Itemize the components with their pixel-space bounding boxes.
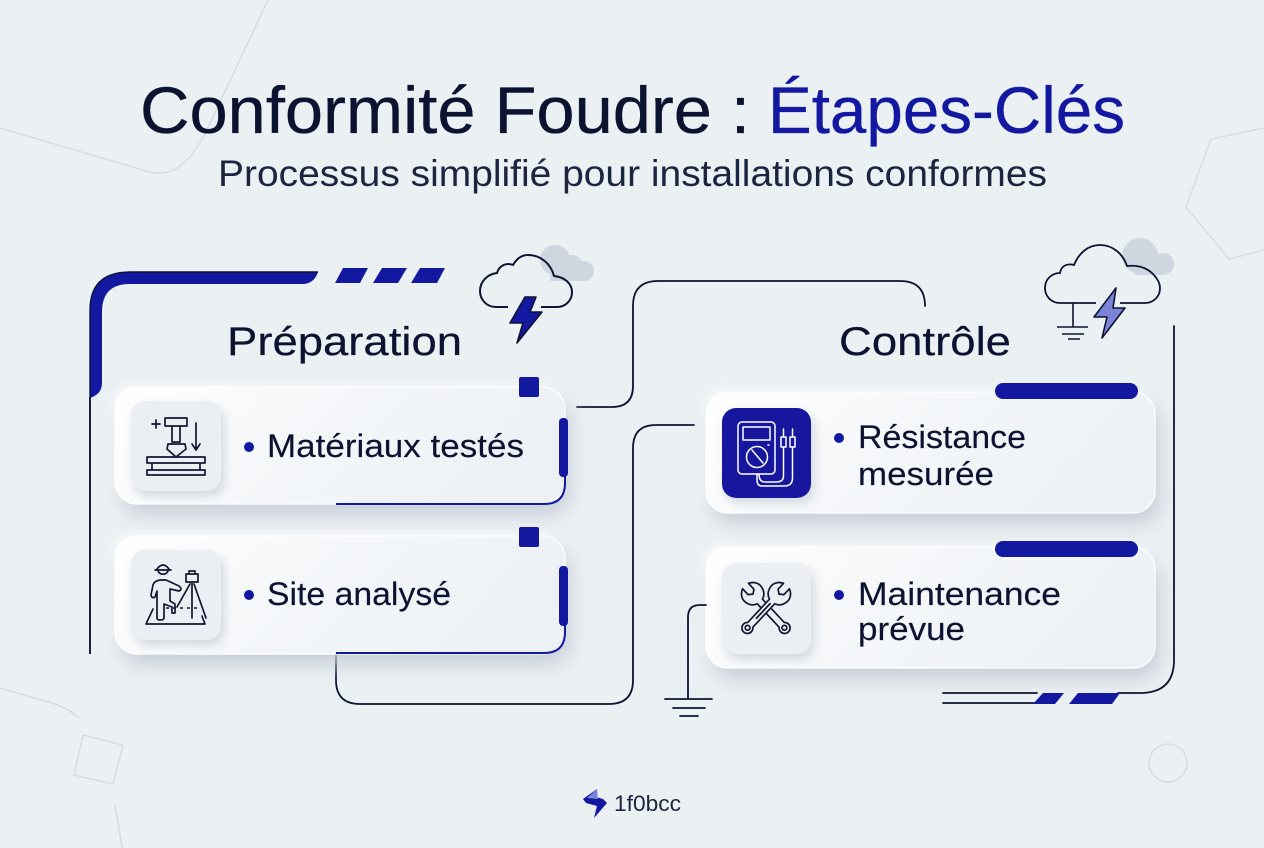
heading: preparation: Préparation <box>227 320 462 364</box>
connector: site card to resistance card <box>336 425 694 704</box>
heading: controle: Contrôle <box>839 320 1011 364</box>
accent: square <box>519 527 539 547</box>
accent: top bar <box>995 541 1138 557</box>
accent: square <box>519 377 539 397</box>
icon: cloud with ground and lightning <box>1045 238 1174 339</box>
panel: card site analyse <box>115 527 568 654</box>
bullet and label <box>834 419 1026 492</box>
panel: card materiaux testes <box>115 377 568 504</box>
bullet and label <box>834 576 1061 647</box>
bullet and label: Maintenance <box>858 576 1061 612</box>
accent: top bar <box>995 383 1138 399</box>
subtitle: Processus simplifié pour installations conformes <box>218 153 1047 194</box>
accent: side bar <box>559 418 568 477</box>
panel: card resistance mesuree <box>706 383 1155 513</box>
accent: side bar <box>559 566 568 626</box>
accent: card border line <box>336 623 565 653</box>
connector: ground symbol <box>665 605 712 716</box>
bullet and label: Site analysé <box>267 576 451 612</box>
connector: preparation card to controle heading <box>577 281 925 407</box>
icon: storm cloud with lightning <box>480 245 594 343</box>
title: Étapes-Clés <box>768 73 1125 147</box>
bullet and label: mesurée <box>858 456 994 492</box>
icon: logo bolt <box>583 789 607 818</box>
bullet and label: Résistance <box>858 419 1026 455</box>
bullet and label: prévue <box>858 611 965 647</box>
panel: preparation frame <box>90 268 445 654</box>
title: Conformité Foudre : <box>140 73 750 147</box>
icon tile: press <box>131 401 221 491</box>
accent: card border line <box>336 474 565 504</box>
icon tile: multimeter <box>722 408 811 498</box>
bullet and label: Matériaux testés <box>267 428 524 464</box>
footer logo <box>583 789 681 818</box>
panel: card maintenance prevue <box>706 541 1155 668</box>
icon tile: crossed wrenches <box>722 563 811 654</box>
icon tile: surveyor <box>131 550 221 640</box>
title <box>140 73 1125 147</box>
logo text: 1f0bcc <box>614 791 681 816</box>
panel: controle frame <box>943 326 1174 704</box>
